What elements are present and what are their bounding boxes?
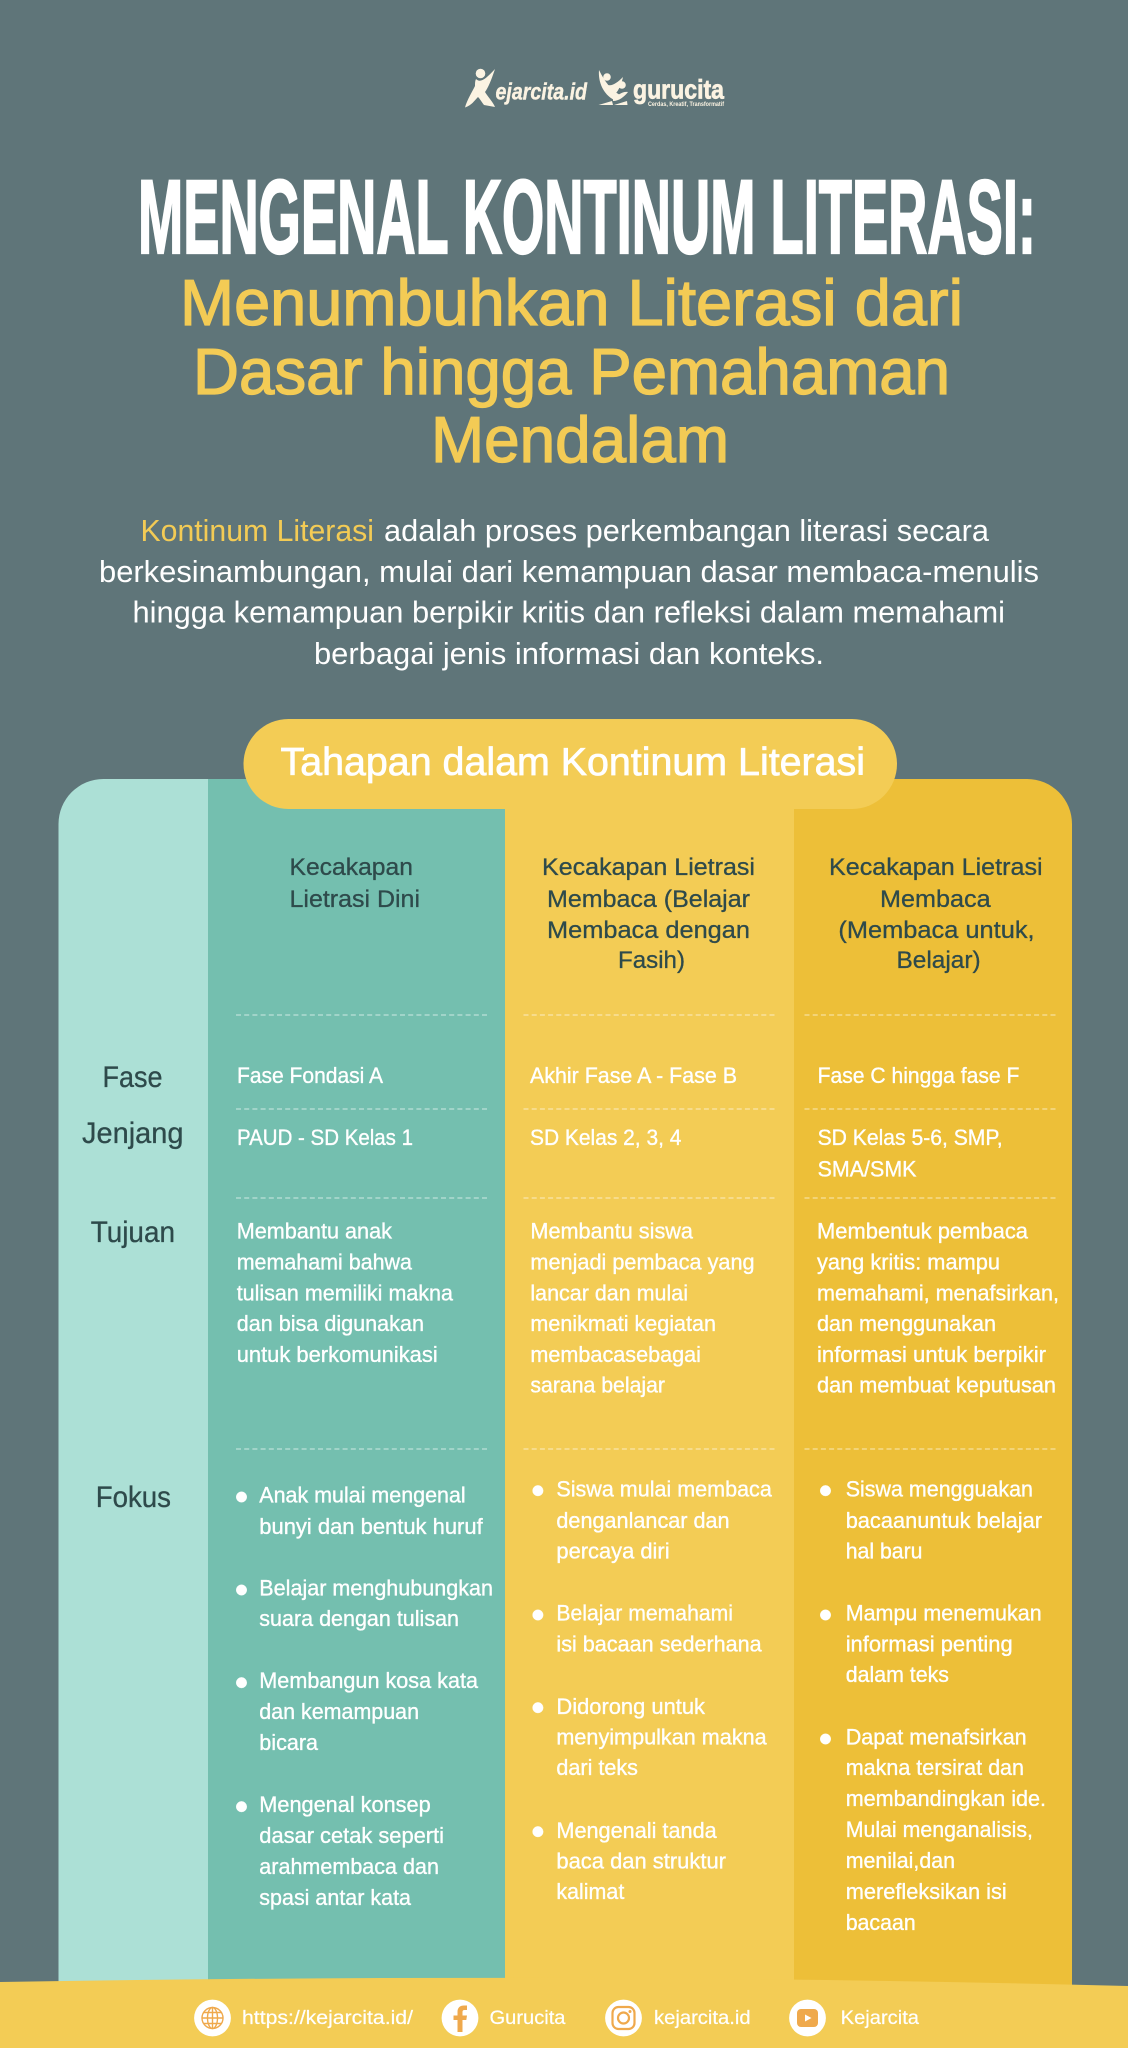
column 1 tujuan: Membantu anak <box>237 1219 393 1244</box>
logo: gurucita <box>598 70 725 108</box>
subtitle <box>180 266 963 476</box>
column 3 heading: Membaca <box>880 886 991 913</box>
column 2 tujuan <box>530 1219 755 1398</box>
column 1 fokus: Membangun kosa kata <box>259 1668 478 1693</box>
column 3 tujuan: dan membuat keputusan <box>817 1373 1056 1398</box>
column 1 fokus <box>236 1483 493 1910</box>
column 2 heading: Kecakapan Lietrasi <box>542 854 755 881</box>
column 3 fokus: Mampu menemukan <box>846 1601 1042 1626</box>
column 3 content <box>817 854 1059 1935</box>
row labels: Fase <box>102 1061 162 1094</box>
column 2 fase and jenjang: Akhir Fase A - Fase B <box>530 1063 737 1088</box>
column 3 tujuan: Membentuk pembaca <box>817 1219 1028 1244</box>
row labels: Tujuan <box>91 1216 175 1249</box>
column 1 content <box>236 854 493 1910</box>
link: website: https://kejarcita.id/ <box>242 2008 414 2029</box>
column 1 fokus: arahmembaca dan <box>259 1854 439 1879</box>
footer band <box>0 1978 1128 2048</box>
column 2 fokus: percaya diri <box>556 1539 670 1564</box>
icon: website <box>194 2000 231 2036</box>
intro paragraph: adalah proses perkembangan literasi secara <box>384 513 990 548</box>
column 3 fokus <box>820 1477 1046 1935</box>
column 3 fase and jenjang: Fase C hingga fase F <box>818 1063 1019 1088</box>
column 2 fokus: Didorong untuk <box>556 1694 706 1719</box>
column 2 tujuan: lancar dan mulai <box>530 1280 688 1306</box>
logo: kejarcita <box>465 69 588 108</box>
icon: facebook <box>442 2000 478 2036</box>
intro paragraph: berkesinambungan, mulai dari kemampuan dasar membaca-menulis <box>99 554 1039 589</box>
subtitle: Dasar hingga Pemahaman <box>193 335 950 408</box>
logo: gurucita: gurucita <box>633 74 725 104</box>
column 3 tujuan <box>817 1219 1059 1398</box>
column 2 fokus: kalimat <box>556 1879 625 1904</box>
column 3 fokus: menilai,dan <box>846 1848 955 1873</box>
column 2 fokus: denganlancar dan <box>556 1508 730 1533</box>
logos <box>465 69 725 108</box>
panel: column membaca untuk belajar <box>794 779 1072 2000</box>
column 3 fase and jenjang: SMA/SMK <box>818 1157 916 1182</box>
column 2 fokus: Siswa mulai membaca <box>556 1477 772 1502</box>
column 1 tujuan: tulisan memiliki makna <box>237 1280 453 1306</box>
column 3 fokus: Dapat menafsirkan <box>846 1724 1027 1749</box>
column 2 heading: Fasih) <box>618 947 685 974</box>
column 1 heading <box>290 854 420 913</box>
intro paragraph: Kontinum Literasi <box>140 513 374 548</box>
column 1 heading: Kecakapan <box>290 854 413 881</box>
column 3 tujuan: informasi untuk berpikir <box>817 1342 1046 1367</box>
column 2 heading: Membaca dengan <box>547 917 750 944</box>
column 1 tujuan: untuk berkomunikasi <box>237 1342 438 1367</box>
column 3 fase and jenjang: SD Kelas 5-6, SMP, <box>818 1125 1003 1150</box>
column 2 fase and jenjang: SD Kelas 2, 3, 4 <box>530 1125 681 1150</box>
section heading pill <box>244 719 897 809</box>
column 2 fokus: Belajar memahami <box>556 1601 733 1626</box>
footer links <box>194 2000 919 2036</box>
column 3 heading: Kecakapan Lietrasi <box>829 854 1043 881</box>
column 3 fase and jenjang <box>818 1063 1019 1182</box>
column 1 fokus: dan kemampuan <box>259 1699 419 1724</box>
column 1 fokus: Mengenal konsep <box>259 1792 431 1817</box>
intro paragraph <box>99 513 1039 671</box>
column 1 fokus: bicara <box>259 1730 318 1755</box>
column 1 heading: Lietrasi Dini <box>290 886 420 913</box>
column 1 tujuan: memahami bahwa <box>237 1250 412 1274</box>
column 1 fokus: bunyi dan bentuk huruf <box>259 1514 483 1539</box>
icon: instagram <box>605 2000 642 2036</box>
column 3 heading: (Membaca untuk, <box>838 917 1035 944</box>
panel: column membaca dengan fasih <box>505 790 794 2000</box>
column 1 tujuan: dan bisa digunakan <box>237 1311 424 1336</box>
column 3 fokus: bacaanuntuk belajar <box>846 1508 1042 1533</box>
column 2 content <box>530 854 772 1904</box>
column 2 fokus: menyimpulkan makna <box>556 1725 767 1750</box>
column 2 heading: Membaca (Belajar <box>547 886 750 913</box>
column 3 heading: Belajar) <box>896 947 981 974</box>
column 2 tujuan: Membantu siswa <box>530 1219 693 1244</box>
column 1 fase and jenjang <box>237 1063 413 1150</box>
row labels: Fokus <box>96 1481 171 1514</box>
column 2 tujuan: membacasebagai <box>530 1342 701 1367</box>
column 1 tujuan <box>237 1219 453 1367</box>
column 1 fokus: Belajar menghubungkan <box>259 1576 493 1601</box>
column 3 tujuan: yang kritis: mampu <box>817 1250 1000 1274</box>
column 2 fokus: isi bacaan sederhana <box>556 1632 762 1657</box>
panel: labels column <box>58 779 208 2000</box>
column 2 tujuan: menjadi pembaca yang <box>530 1250 755 1274</box>
column 3 fokus: bacaan <box>846 1910 916 1935</box>
column 3 fokus: Mulai menganalisis, <box>846 1817 1033 1842</box>
column 2 fokus: dari teks <box>556 1755 638 1780</box>
intro paragraph: hingga kemampuan berpikir kritis dan refleksi dalam memahami <box>132 594 1005 630</box>
column 3 tujuan: dan menggunakan <box>817 1311 996 1336</box>
column 1 fokus: dasar cetak seperti <box>259 1823 444 1848</box>
column 3 fokus: Siswa mengguakan <box>846 1477 1033 1502</box>
column 3 fokus: dalam teks <box>846 1662 949 1687</box>
link: facebook: Gurucita <box>490 2008 566 2029</box>
column 3 fokus: membandingkan ide. <box>846 1786 1046 1811</box>
column 2 tujuan: menikmati kegiatan <box>530 1311 716 1336</box>
column 1 fase and jenjang: PAUD - SD Kelas 1 <box>237 1125 413 1150</box>
icon: youtube <box>789 2000 826 2036</box>
column 3 tujuan: memahami, menafsirkan, <box>817 1280 1059 1306</box>
column 1 fokus: Anak mulai mengenal <box>259 1483 466 1508</box>
subtitle: Mendalam <box>431 403 729 476</box>
link: instagram: kejarcita.id <box>654 2008 751 2029</box>
column 1 fokus: suara dengan tulisan <box>259 1606 459 1631</box>
column 2 fase and jenjang <box>530 1063 737 1150</box>
row labels <box>82 1061 184 1514</box>
link: youtube: Kejarcita <box>841 2008 919 2029</box>
column 3 heading <box>829 854 1043 974</box>
column 2 fokus: Mengenali tanda <box>556 1818 717 1843</box>
panel: column literasi dini <box>208 779 505 2000</box>
column 2 fokus <box>533 1477 772 1904</box>
column 3 fokus: merefleksikan isi <box>846 1879 1007 1904</box>
row labels: Jenjang <box>82 1117 184 1150</box>
column 1 fase and jenjang: Fase Fondasi A <box>237 1063 383 1088</box>
section heading pill: Tahapan dalam Kontinum Literasi <box>280 741 865 784</box>
subtitle: Menumbuhkan Literasi dari <box>180 266 963 339</box>
logo: kejarcita: ejarcita.id <box>496 78 588 104</box>
logo: gurucita: Cerdas, Kreatif, Transformatif <box>648 101 725 108</box>
column 3 fokus: hal baru <box>846 1539 922 1564</box>
column 3 fokus: makna tersirat dan <box>846 1755 1024 1780</box>
column 2 tujuan: sarana belajar <box>530 1373 665 1398</box>
intro paragraph: berbagai jenis informasi dan konteks. <box>314 636 824 671</box>
column 2 heading <box>542 854 755 974</box>
column 3 fokus: informasi penting <box>846 1632 1013 1657</box>
column 2 fokus: baca dan struktur <box>556 1849 726 1874</box>
column 1 fokus: spasi antar kata <box>259 1885 411 1910</box>
